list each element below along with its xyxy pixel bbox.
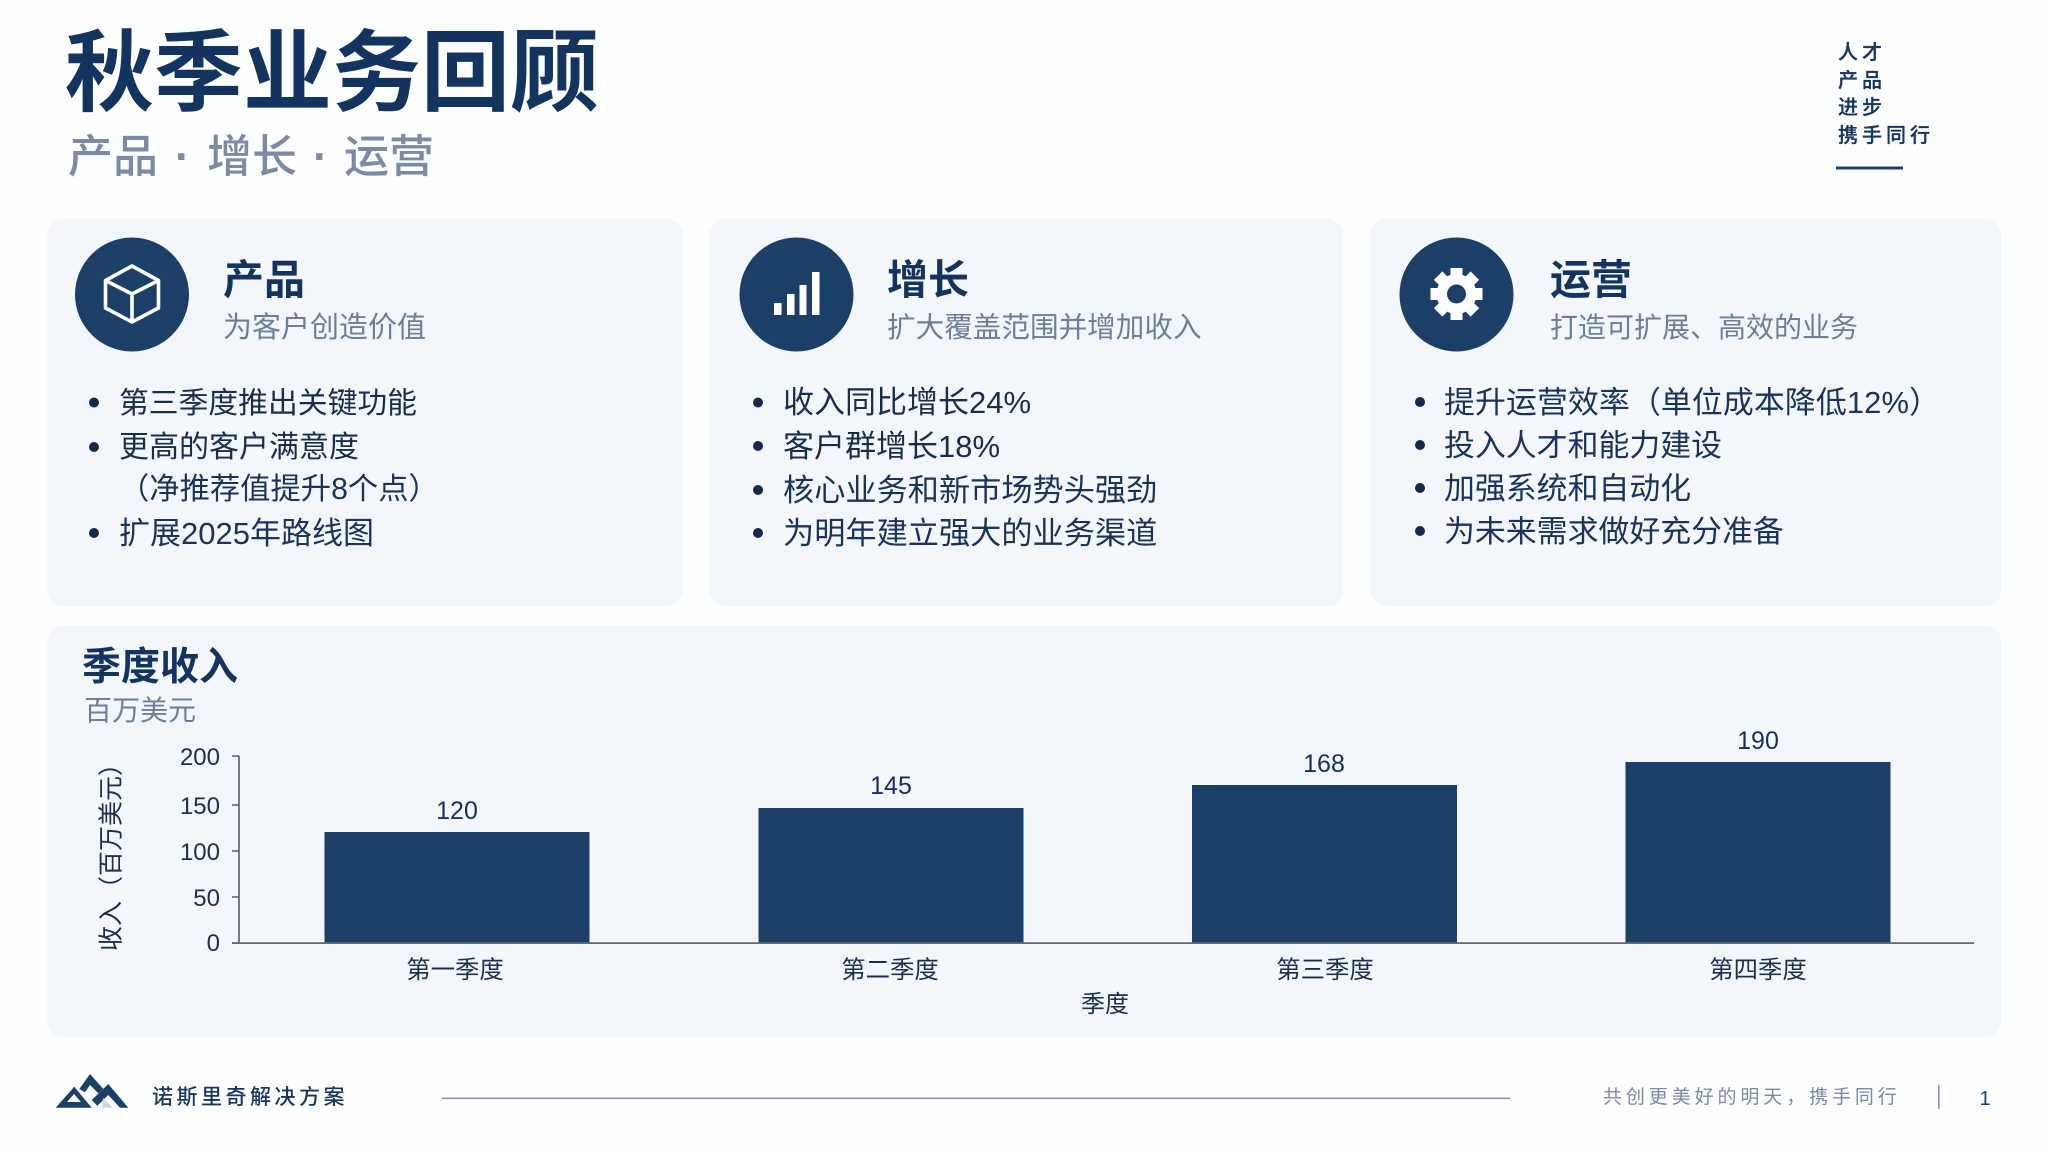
footer rule (442, 1098, 1510, 1099)
logo: mountains (56, 1074, 128, 1108)
title: 秋季业务回顾 (65, 23, 599, 123)
bullet list: product: 第三季度推出关键功能 (119, 387, 417, 420)
bullet list: operations: 加强系统和自动化 (1444, 471, 1691, 506)
bar: Q1 (324, 797, 590, 943)
x axis: 第三季度 (1276, 957, 1374, 984)
bar: Q4: 190 (1737, 727, 1779, 755)
bar: Q2: 145 (870, 772, 912, 800)
bullet list: growth: 为明年建立强大的业务渠道 (783, 516, 1157, 551)
subtitle: · (313, 131, 328, 182)
icon: cube (75, 238, 189, 352)
panel: operations (1370, 219, 2002, 606)
bullet list: growth (753, 385, 1157, 551)
bullet list: operations: 为未来需求做好充分准备 (1444, 514, 1784, 549)
heading: growth: 增长 (887, 257, 969, 303)
x axis: 第二季度 (841, 957, 939, 984)
panel: growth (710, 219, 1344, 606)
subtitle: 增长 (207, 131, 297, 182)
bullet list: growth: 核心业务和新市场势头强劲 (783, 473, 1157, 508)
x axis (232, 942, 1974, 1018)
bullet list: growth: 客户群增长18% (783, 429, 1000, 464)
panel: quarterly revenue (47, 626, 2002, 1037)
bar: Q3: 168 (1303, 750, 1345, 778)
bullet list: operations (1415, 385, 1940, 549)
subheading: operations: 打造可扩展、高效的业务 (1550, 312, 1858, 343)
bullet list: operations: 投入人才和能力建设 (1444, 428, 1722, 463)
x axis: 第一季度 (406, 957, 504, 984)
tagline: top right (1836, 41, 1934, 170)
bar: Q4 (1626, 727, 1890, 943)
x axis: 第四季度 (1709, 957, 1807, 984)
bullet list: product: （净推荐值提升8个点） (119, 472, 439, 506)
y axis: 0 (207, 930, 220, 957)
x axis: 季度 (1081, 991, 1129, 1018)
bar: Q3 (1192, 750, 1457, 943)
icon: gear (1400, 238, 1514, 352)
icon: signal bars (740, 238, 854, 352)
bar chart (98, 727, 1974, 1018)
bullet list: product: 扩展2025年路线图 (119, 516, 374, 551)
chart subheading: 百万美元 (84, 695, 196, 726)
y axis: 50 (193, 885, 220, 912)
bullet list: growth: 收入同比增长24% (783, 385, 1031, 420)
chart heading: 季度收入 (82, 646, 238, 689)
subtitle: · (175, 131, 190, 182)
brand name: 诺斯里奇解决方案 (152, 1086, 348, 1109)
tagline: top right: 人才 (1838, 41, 1886, 64)
bar: Q2 (758, 772, 1024, 943)
tagline: top right: 携手同行 (1838, 124, 1934, 147)
subtitle: 运营 (344, 131, 434, 182)
bullet list: product (89, 387, 439, 551)
footer separator (1938, 1085, 1940, 1109)
subtitle (68, 131, 434, 182)
heading: operations: 运营 (1550, 257, 1632, 303)
tagline: top right: 产品 (1838, 69, 1886, 92)
bar: Q1: 120 (436, 797, 478, 825)
panel: product (47, 219, 683, 606)
subheading: growth: 扩大覆盖范围并增加收入 (887, 312, 1202, 344)
y axis (180, 744, 239, 957)
bullet list: operations: 提升运营效率（单位成本降低12%） (1444, 385, 1940, 420)
page number: 1 (1979, 1088, 1991, 1110)
tagline: top right: 进步 (1838, 96, 1886, 119)
y axis: 150 (180, 793, 220, 820)
y axis title: 收入（百万美元） (98, 751, 126, 951)
subtitle: 产品 (68, 131, 158, 182)
y axis: 100 (180, 839, 220, 866)
footer tagline: 共创更美好的明天，携手同行 (1603, 1086, 1901, 1108)
y axis: 200 (180, 744, 220, 771)
subheading: product: 为客户创造价值 (223, 311, 426, 344)
heading: product: 产品 (223, 257, 305, 303)
bullet list: product: 更高的客户满意度 (119, 431, 359, 464)
